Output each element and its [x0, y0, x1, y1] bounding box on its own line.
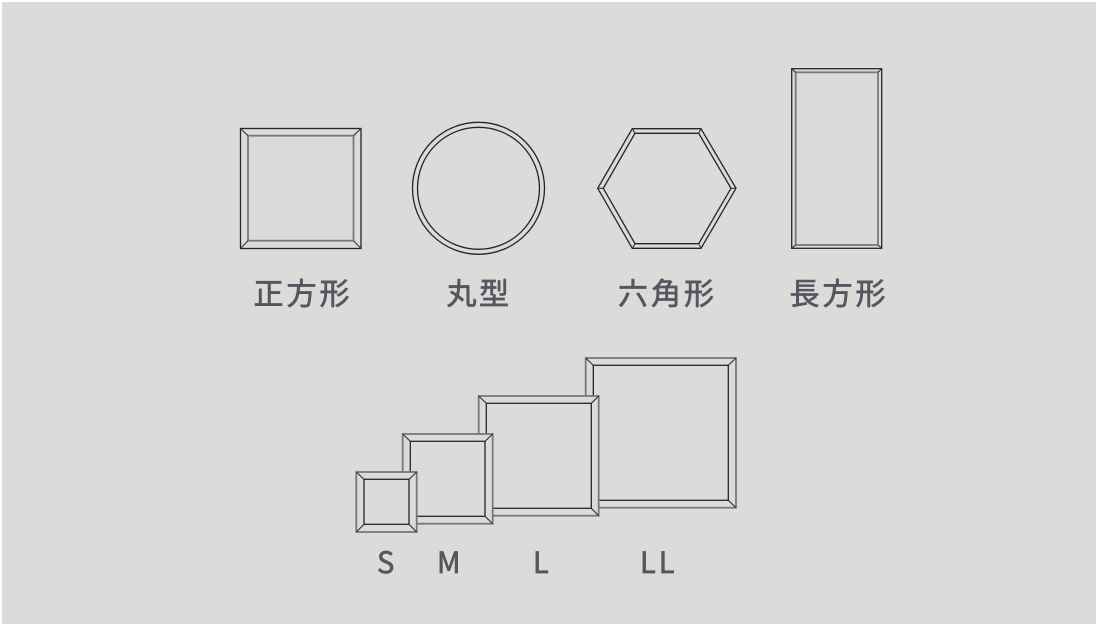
label: M: M	[437, 540, 461, 582]
shape: hexagon frame	[598, 129, 736, 248]
label: S: S	[377, 540, 394, 582]
frame: S	[356, 472, 417, 532]
shape: rectangle frame	[792, 69, 882, 248]
frame: LL	[586, 358, 736, 508]
label: LL: LL	[640, 540, 678, 582]
label: L: L	[533, 540, 549, 582]
size comparison group	[356, 358, 736, 532]
label: hexagon: 六角形	[618, 270, 717, 314]
shape: round frame	[412, 122, 544, 254]
label: round: 丸型	[446, 270, 512, 314]
shape: square frame	[240, 128, 361, 248]
frame: M	[403, 434, 493, 524]
label: square: 正方形	[254, 270, 352, 314]
label: rectangle: 長方形	[790, 270, 888, 314]
frame: L	[479, 396, 599, 516]
